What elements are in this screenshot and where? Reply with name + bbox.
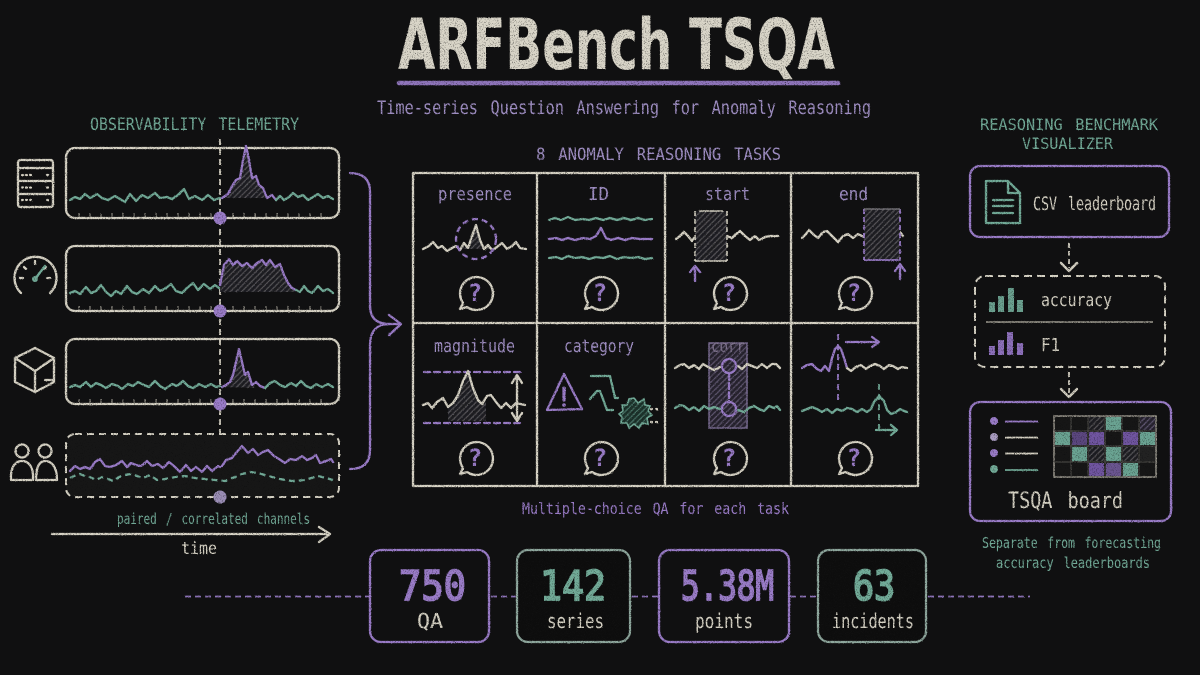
question bubble: ?	[722, 279, 736, 307]
stat: 5.38M points	[659, 550, 789, 642]
question bubble: ?	[593, 279, 607, 307]
task: presence	[423, 184, 526, 310]
icon: burst	[619, 398, 652, 428]
question bubble: ?	[468, 279, 482, 307]
stat: 63 incidents: incidents	[832, 609, 914, 633]
arrow: bracket into tasks	[350, 173, 401, 469]
panel: server metric	[66, 146, 339, 224]
question bubble: ?	[847, 279, 861, 307]
panel: container metric	[66, 339, 339, 410]
task: ID	[549, 184, 652, 310]
title underline	[399, 81, 838, 85]
panel: CSV leaderboard	[970, 166, 1169, 237]
stat: 750 QA: QA	[417, 609, 443, 633]
arrow: metrics to board	[1068, 372, 1070, 395]
shared time marker	[219, 139, 221, 497]
question bubble	[839, 442, 872, 475]
question bubble: ?	[468, 444, 482, 472]
caption: separate from forecasting: accuracy leaderboards	[996, 554, 1150, 572]
stats connector	[185, 596, 1030, 598]
task: lag	[802, 334, 907, 475]
panel: TSQA board	[970, 402, 1171, 521]
question bubble: ?	[593, 444, 607, 472]
arrow: CSV to metrics	[1068, 243, 1070, 268]
task: corr	[675, 337, 780, 475]
task: start: start	[705, 184, 750, 205]
panel: telemetry timelines	[66, 139, 339, 504]
panel: metrics	[975, 276, 1165, 367]
icon: container cube	[15, 348, 54, 392]
stat: 750 QA	[370, 550, 489, 642]
paired channels caption: paired / correlated channels	[117, 510, 310, 528]
heading: observability telemetry: OBSERVABILITY TELEMETRY	[90, 115, 299, 135]
heading: tasks: 8 ANOMALY REASONING TASKS	[536, 145, 781, 165]
icon: server stack	[18, 160, 53, 207]
task: category: category	[564, 336, 634, 357]
panel: task grid	[413, 173, 918, 486]
task: ID: ID	[588, 184, 609, 205]
heatmap	[1054, 416, 1156, 477]
task: magnitude: magnitude	[434, 336, 515, 357]
stat: 142 series: 142	[540, 562, 606, 610]
stat: 750 QA: 750	[399, 562, 466, 610]
panel: TSQA board: TSQA board	[1008, 489, 1123, 514]
panel: paired channels	[66, 434, 339, 504]
heading: benchmark visualizer: REASONING BENCHMARK	[980, 115, 1158, 134]
panel: gauge metric	[66, 246, 339, 318]
arrowheads between right column boxes	[1061, 263, 1077, 397]
panel: metrics: accuracy	[1041, 290, 1112, 311]
task: end: end	[839, 184, 868, 205]
time arrow	[52, 527, 330, 542]
task: magnitude	[423, 336, 525, 475]
caption: multiple choice: Multiple-choice QA for each task	[522, 499, 789, 518]
icon: gauge	[14, 257, 57, 293]
heading: benchmark visualizer: VISUALIZER	[1022, 134, 1113, 153]
icon: purple bars	[989, 332, 1023, 355]
caption: separate from forecasting	[982, 534, 1161, 572]
stat: 5.38M points: points	[695, 609, 753, 633]
icon: warning triangle	[547, 374, 582, 410]
subtitle: Time-series Question Answering for Anomaly Reasoning	[377, 97, 871, 119]
task: start	[676, 184, 778, 310]
title: ARFBench TSQA	[398, 4, 835, 86]
task: presence: presence	[438, 184, 512, 205]
icon: green bars	[989, 288, 1023, 312]
question bubble: ?	[722, 444, 736, 472]
stat: 5.38M points: 5.38M	[681, 562, 774, 610]
stat: 63 incidents: 63	[853, 562, 895, 610]
task: category	[547, 336, 657, 475]
task: end	[802, 184, 905, 310]
task: corr: corr	[711, 337, 745, 357]
icon: two people	[11, 444, 57, 480]
stat: 63 incidents	[818, 550, 926, 642]
time label: time	[181, 539, 217, 559]
stat: 142 series: series	[547, 609, 604, 633]
icon: document	[986, 181, 1020, 223]
stat: 142 series	[517, 550, 630, 642]
panel: metrics: F1	[1041, 335, 1060, 356]
heading: benchmark visualizer	[980, 115, 1158, 153]
question bubble: ?	[847, 444, 861, 472]
legend list	[990, 417, 1038, 473]
